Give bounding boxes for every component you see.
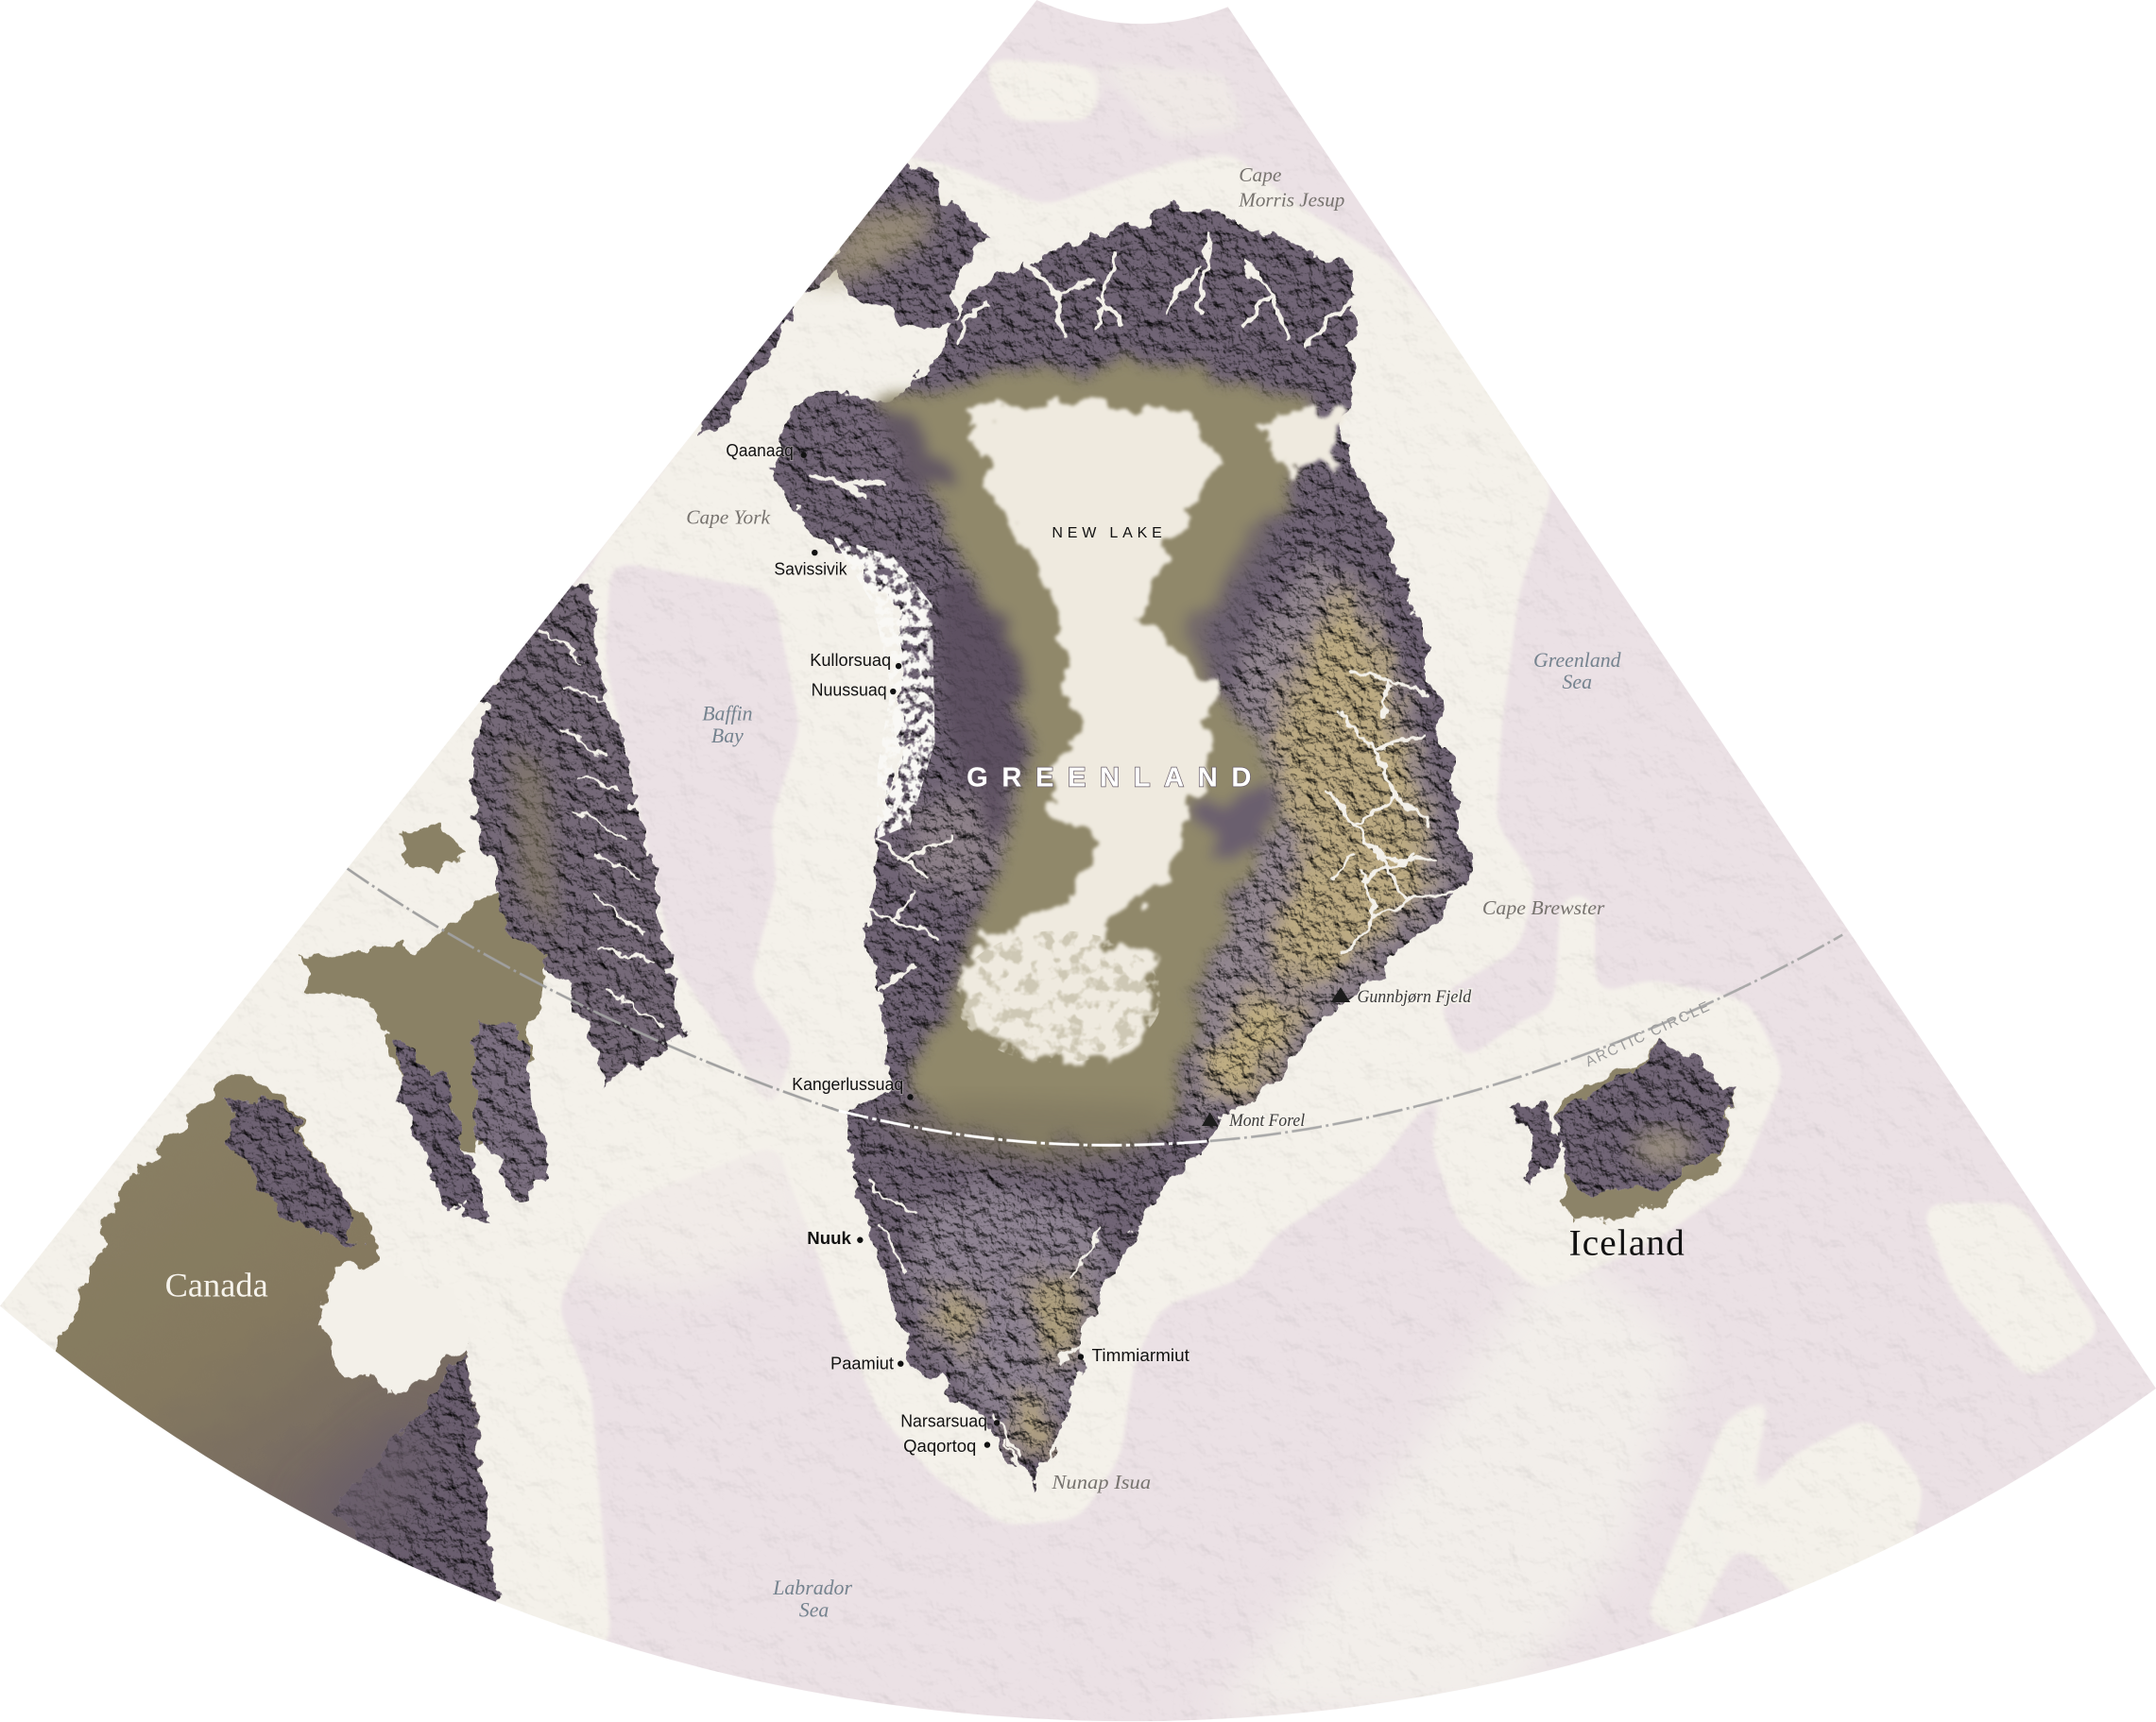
Canada and islands highlands [227, 162, 1736, 1609]
labels: Narsarsuaq [900, 1412, 987, 1431]
labels: Qaqortoq [903, 1437, 976, 1456]
pale water south of Baffin [600, 1151, 799, 1273]
labels: Bay [711, 725, 744, 747]
labels: Morris Jesup [1238, 188, 1344, 211]
Greenland title: GREENLAND [967, 762, 1263, 793]
south gold patches [928, 1286, 984, 1355]
arctic circle grey line west [344, 866, 839, 1111]
mottled lower ice [949, 928, 1169, 1066]
west coast speckle [825, 529, 942, 852]
Mont Forel gold [1196, 990, 1307, 1100]
labels: Nuuk [807, 1229, 852, 1248]
labels: Greenland [1533, 649, 1621, 672]
land: Iceland west peninsula [1506, 1102, 1565, 1180]
land: Baffin south peaks [392, 1031, 488, 1223]
east grey plateau [1183, 550, 1458, 1141]
land: Canada mainland [0, 1072, 498, 1649]
place names: Qaanaaq [726, 441, 794, 460]
Greenland land with relief [743, 193, 1513, 1512]
fjords: Baffin [543, 632, 660, 1024]
Canada label: Canada [165, 1266, 268, 1304]
snow north east [1258, 413, 1341, 468]
east gold band [1272, 577, 1430, 990]
Ellesmere olive patch [812, 206, 935, 289]
labels: Kangerlussuaq [792, 1075, 903, 1094]
labels: Sea [1563, 671, 1592, 693]
labels: Paamiut [830, 1355, 894, 1373]
Arctic Circle label: ARCTIC CIRCLE [1583, 997, 1715, 1070]
dark east inner [1196, 784, 1272, 860]
fjords [543, 233, 1461, 1488]
labels [165, 163, 1715, 1622]
Canada transition shading [296, 1416, 440, 1554]
Iceland label: Iceland [1569, 1223, 1685, 1264]
Baffin olive interior [511, 742, 556, 935]
labels: Mont Forel [1228, 1111, 1305, 1131]
labels: Cape [1239, 163, 1281, 186]
Canadian white lake [319, 1258, 474, 1395]
shelf: Iceland [1430, 979, 1785, 1292]
Iceland glow [1634, 1129, 1694, 1168]
dark inner west [940, 577, 1023, 839]
shelf: Greenland [591, 151, 1554, 1526]
fjords: west [866, 742, 949, 990]
Greenland base [743, 193, 1513, 1512]
land: Canada dark highlands [227, 1100, 357, 1244]
place dots [800, 452, 1084, 1448]
snow interior [963, 399, 1226, 1066]
north west grey [804, 399, 915, 508]
labels: Sea [799, 1599, 829, 1622]
labels: Cape Brewster [1482, 896, 1605, 919]
central west grey [908, 784, 1024, 894]
labels: Nuussuaq [812, 680, 887, 699]
dark north east ridge [1183, 495, 1292, 688]
interior olive ice margin [880, 365, 1320, 1148]
peak triangles [1202, 987, 1350, 1126]
shelf: ridge to Iceland [1554, 894, 1595, 1017]
olive south band [880, 1100, 1169, 1168]
shelf: Canada [0, 543, 784, 1649]
land: Canada south east [330, 1355, 498, 1609]
labels: Kullorsuaq [810, 651, 891, 670]
arctic circle grey line east [1210, 935, 1842, 1141]
interior snow [963, 399, 1341, 1066]
fjords: north [812, 233, 1361, 498]
labels: Timmiarmiut [1092, 1346, 1189, 1365]
land: Baffin olive [302, 879, 543, 1155]
olive interior [880, 365, 1320, 1148]
land: Baffin peninsula [474, 1024, 547, 1196]
fjords: south [869, 1183, 1100, 1488]
pale ridge south east [1243, 1273, 1676, 1712]
shelf: south east patches [1739, 1416, 1925, 1615]
geographic names: Cape York [686, 506, 771, 529]
Arctic Circle [344, 866, 1842, 1145]
land: Iceland interior [1561, 1045, 1736, 1199]
New Lake: NEW LAKE [1052, 525, 1166, 541]
peak names: Gunnbjørn Fjeld [1357, 987, 1472, 1007]
land: Ellesmere [694, 162, 990, 433]
labels: Nunap Isua [1051, 1471, 1151, 1493]
land: Baffin Island [474, 571, 680, 1086]
fjords: east [1326, 673, 1461, 955]
labels: Savissivik [774, 559, 847, 578]
dark north west ridge [880, 405, 949, 488]
arctic circle white line [839, 1111, 1210, 1145]
Canada lowlands [0, 821, 1736, 1649]
land: Baffin lake blob [405, 821, 465, 878]
labels: Labrador [772, 1577, 852, 1599]
sea names: Baffin [702, 703, 753, 725]
south grey plateau [908, 1183, 1114, 1458]
land: Iceland olive rim [1561, 1045, 1736, 1217]
speckled ice [825, 529, 942, 852]
